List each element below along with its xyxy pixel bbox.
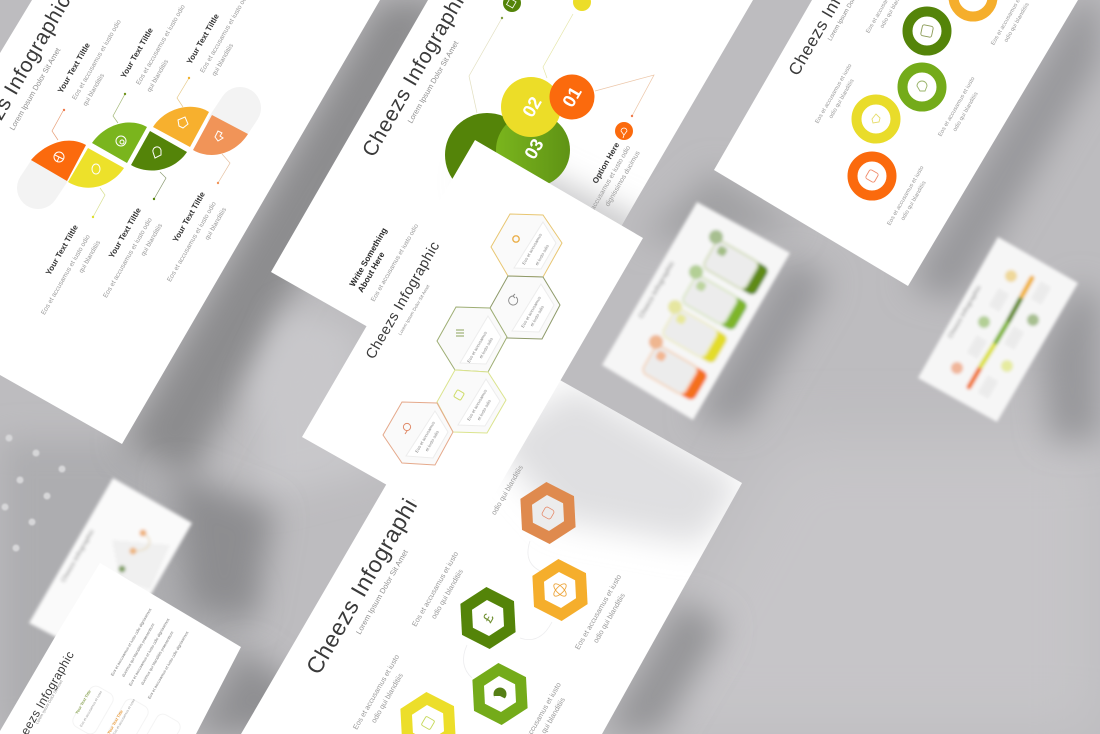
bottom labels: qui blanditiis xyxy=(140,222,164,257)
ring dark green xyxy=(908,12,946,50)
panel: hexagon outline slide xyxy=(302,140,643,533)
bottom labels xyxy=(40,190,228,316)
hexagon cell 2: Eos et accusamus xyxy=(520,296,542,328)
hexagon amber xyxy=(532,559,588,621)
bottom labels: Your Text Tiltle xyxy=(44,223,80,277)
hexagon green xyxy=(472,663,528,725)
ring captions: odio qui blanditiis xyxy=(828,78,856,120)
ring captions xyxy=(814,0,1031,227)
panel: blurred timeline slide xyxy=(918,237,1078,422)
side heading: Write Something xyxy=(347,226,389,288)
shadow on circles slide xyxy=(549,168,636,226)
option badges xyxy=(503,0,633,140)
hexagon captions: odio qui blanditiis xyxy=(369,671,405,724)
top labels: Your Text Tiltle xyxy=(119,26,155,80)
bottom labels: Your Text Tiltle xyxy=(171,190,207,244)
side description: Eos et accusamus et iusto odio xyxy=(370,223,420,303)
slide title: Cheezs Infographic xyxy=(301,483,429,678)
body text column: ducimus qui blanditiis praesentium xyxy=(140,630,175,686)
hexagon cell 5: Eos et accusamus xyxy=(414,421,436,453)
panel: hexagon icons slide xyxy=(241,380,742,734)
body text column: Eos et accusamus et iusto odio dignissimos xyxy=(127,617,171,687)
panel: wave infographic slide xyxy=(0,0,380,444)
body text column: ducimus qui blanditiis praesentium xyxy=(121,622,156,678)
top labels: Your Text Tiltle xyxy=(185,12,221,66)
blurred slide heading: Cheezs Infographic xyxy=(947,284,983,340)
hexagon dark green: £ xyxy=(479,610,497,625)
bottom labels: Your Text Tiltle xyxy=(107,206,143,260)
hexagon cell 3 xyxy=(437,307,507,372)
tile badges xyxy=(649,230,723,349)
panel: circles slide xyxy=(271,0,753,326)
ring captions: odio qui blanditiis xyxy=(952,91,980,133)
leader lines xyxy=(52,77,230,218)
hexagon captions: Eos et accusamus et iusto xyxy=(351,653,401,731)
side heading second line: About Here xyxy=(355,250,387,294)
hexagon yellow xyxy=(400,692,456,734)
ring captions: Eos et accusamus et iusto xyxy=(886,165,926,227)
tile 2 xyxy=(681,274,749,332)
blurred slide heading: Cheezs Infographic xyxy=(60,528,96,584)
bottom labels: Eos et accusamus et iusto odio xyxy=(166,200,218,283)
slide subtitle: Lorem Ipsum Dolor Sit Amet xyxy=(8,45,63,132)
hexagon cell 5: et iusto odio xyxy=(424,429,440,452)
hexagon cell 1 xyxy=(491,214,562,277)
circle 03 xyxy=(496,113,570,187)
hexagon cell 4: et iusto odio xyxy=(476,398,492,421)
hexagon cell 1: Eos et accusamus xyxy=(521,233,543,265)
wave icons xyxy=(54,117,223,174)
hexagon captions: Eos et accusamus et iusto xyxy=(573,573,623,651)
top labels: qui blanditiis xyxy=(82,72,106,107)
number labels: 03 xyxy=(520,135,548,163)
bottom labels: Eos et accusamus et iusto odio xyxy=(40,233,92,316)
top labels xyxy=(56,0,251,107)
circle 02 xyxy=(501,77,561,137)
slide subtitle: Lorem Ipsum Dolor Sit Amet xyxy=(354,547,410,636)
decorative dot grid xyxy=(2,434,66,552)
hexagon cell 3: et iusto odio xyxy=(478,336,494,359)
text cards: Your Text Title xyxy=(74,688,92,715)
text cards: Eos et accusamus et iusto xyxy=(79,690,103,728)
ring yellow xyxy=(856,100,896,138)
hexagon cell 3: Eos et accusamus xyxy=(466,331,488,363)
hexagon dark green xyxy=(460,587,516,649)
blurred slide heading: Cheezs Infographic xyxy=(638,260,676,320)
shadow on hexagon icons slide xyxy=(490,385,742,545)
top labels: Your Text Tiltle xyxy=(56,41,92,95)
connector arcs xyxy=(463,541,552,678)
hexagon cell 5 xyxy=(383,402,453,465)
option text: dignissimos ducimus xyxy=(604,150,642,208)
number labels: 02 xyxy=(518,93,546,121)
hexagon cell 1: et iusto odio xyxy=(534,243,550,266)
panel: blurred tile slide xyxy=(602,202,790,420)
hexagon cell 4: Eos et accusamus xyxy=(466,389,488,421)
hexagon cell 2 xyxy=(490,276,560,339)
ring captions: Eos et accusamus et iusto xyxy=(937,76,977,138)
hexagon salmon xyxy=(520,482,576,544)
timeline nodes xyxy=(951,270,1039,374)
leader lines xyxy=(469,14,654,117)
hexagon captions: odio qui blanditiis xyxy=(489,463,525,516)
hexagon cell 4 xyxy=(437,370,506,433)
panel: slide with text cards xyxy=(0,563,241,734)
tile 3 xyxy=(661,307,729,365)
ring captions: odio qui blanditiis xyxy=(900,180,928,222)
text cards xyxy=(70,684,183,734)
top labels: Eos et accusamus et iusto odio xyxy=(71,18,123,101)
body text column xyxy=(109,607,190,700)
hexagon captions: odio qui blanditiis xyxy=(591,591,627,644)
hexagon cell 2: et iusto odio xyxy=(529,304,545,327)
ring captions: Eos et accusamus et iusto xyxy=(814,63,854,125)
timeline text blocks xyxy=(967,281,1051,399)
slide title: Cheezs Infographic xyxy=(363,239,443,362)
slide subtitle: Lorem Ipsum Dolor Sit Amet xyxy=(406,38,461,125)
bottom labels: qui blanditiis xyxy=(204,206,228,241)
top labels: qui blanditiis xyxy=(211,42,235,77)
circle 01 xyxy=(550,74,594,120)
number labels: 01 xyxy=(558,83,586,111)
ring amber xyxy=(954,0,992,16)
hexagon captions: Eos et accusamus et iusto xyxy=(410,550,460,628)
body text column: Eos et accusamus et iusto odio dignissimos xyxy=(146,630,190,700)
blurred slide graphic xyxy=(112,530,170,590)
circle 03 outer xyxy=(445,113,529,197)
top labels: qui blanditiis xyxy=(146,58,170,93)
hexagon captions xyxy=(351,463,627,734)
bottom labels: Eos et accusamus et iusto odio xyxy=(102,216,154,299)
tile 4 xyxy=(641,344,709,402)
ring green xyxy=(902,68,942,106)
ring orange xyxy=(852,156,892,196)
panel: ring slide xyxy=(714,0,1078,286)
slide subtitle: Lorem Ipsum Dolor Sit Amet xyxy=(34,678,64,725)
hexagon captions: odio qui blanditiis xyxy=(429,567,465,620)
top labels: Eos et accusamus et iusto odio xyxy=(135,3,187,86)
timeline bar xyxy=(969,278,1032,387)
option text: Option Here xyxy=(591,140,622,185)
option text: accusamus et iusto odio xyxy=(590,144,632,211)
slide subtitle: Lorem Ipsum Dolor Sit Amet xyxy=(397,283,431,336)
bottom labels: qui blanditiis xyxy=(78,239,102,274)
tile 1 xyxy=(702,239,770,297)
wave end caps xyxy=(38,108,240,188)
body text column: Eos et accusamus et iusto odio dignissimos xyxy=(109,607,153,677)
panel: blurred hub slide xyxy=(29,478,192,665)
wave segments xyxy=(31,107,248,188)
number labels xyxy=(518,83,586,163)
ring captions: odio qui blanditiis xyxy=(1003,2,1031,44)
